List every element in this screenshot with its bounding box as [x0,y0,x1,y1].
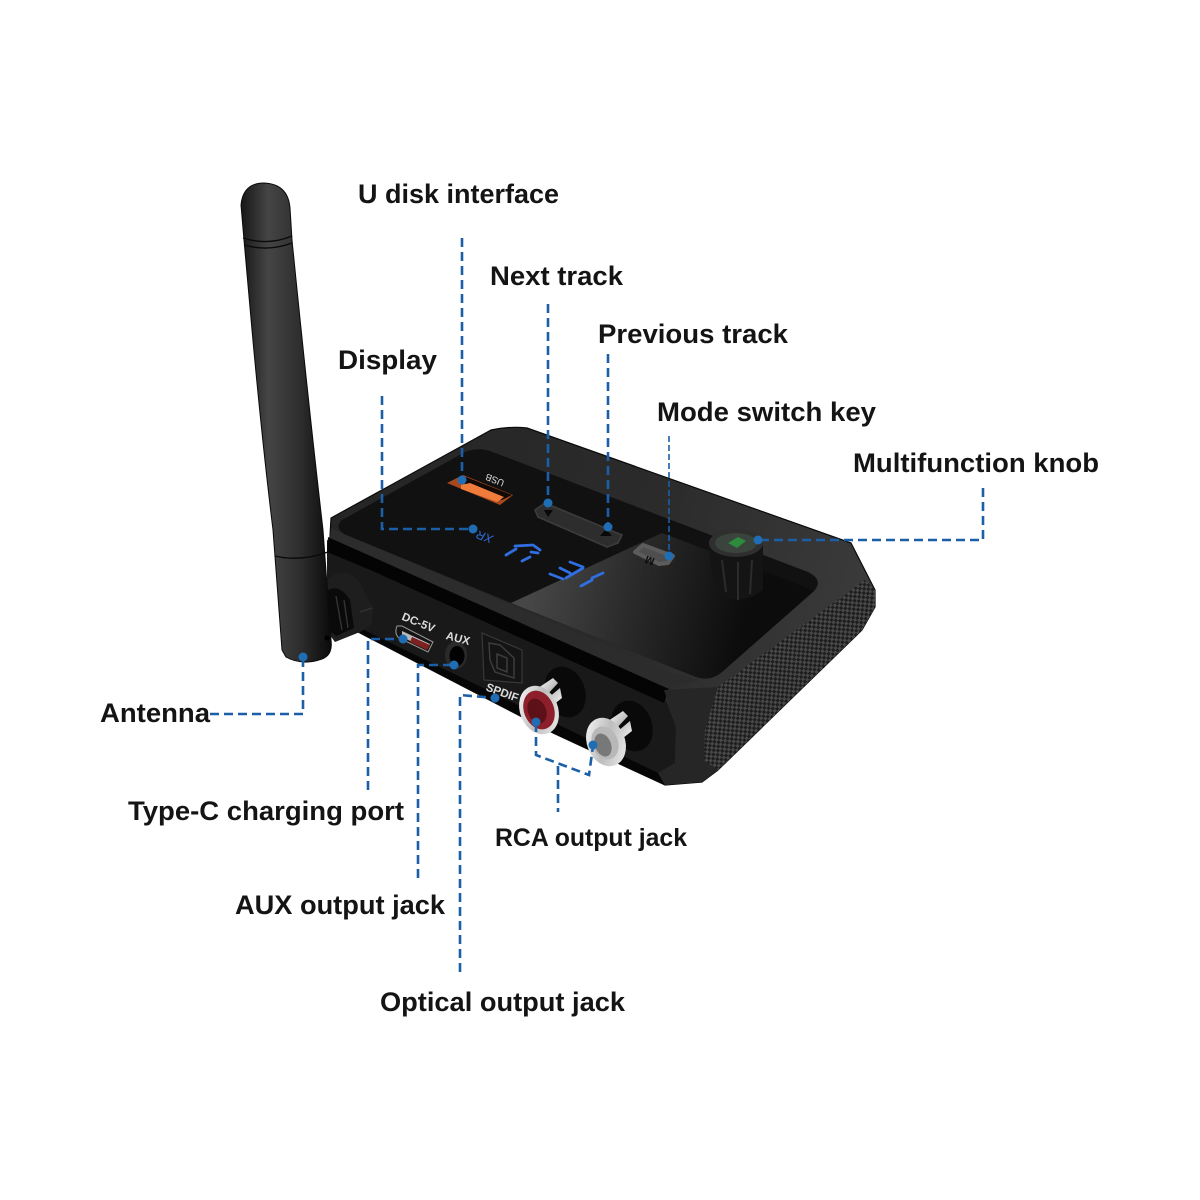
callout: Antenna: Antenna [100,698,211,728]
carbon fibre side panel [704,580,875,770]
callout: Display: Display [338,345,437,375]
multifunction knob [709,529,763,600]
callout: Multifunction knob [754,448,1099,544]
callout: RCA output jack [495,718,687,852]
body silhouette and top bevel [327,427,875,785]
device: audio receiver [241,183,875,785]
previous track arrow [600,529,612,536]
green power indicator [728,537,746,548]
glossy lower panel [511,533,814,679]
white RCA jack [579,695,660,772]
callout: Optical output jack [380,694,626,1017]
callout: Next track: Next track [490,261,624,291]
SPDIF label: SPDIF [484,682,520,705]
mode button letter: M [644,553,656,567]
track buttons [535,503,622,547]
callout: Type-C charging port [128,634,408,826]
USB label: USB [484,471,506,488]
antenna [241,183,331,662]
callout: Next track [490,261,624,508]
DC-5V label: DC-5V [400,611,437,635]
callout: Previous track [598,319,789,532]
callout: Previous track: Previous track [598,319,789,349]
callout: Display [338,345,478,534]
callout: RCA output jack: RCA output jack [495,824,687,852]
callout: Optical output jack: Optical output jack [380,987,626,1017]
top control panel [338,449,818,679]
LED display [506,545,603,586]
callout: Multifunction knob: Multifunction knob [853,448,1099,478]
Type-C port [396,611,437,652]
antenna swivel mount [326,573,374,642]
right corner block [658,687,718,785]
callout: AUX output jack [235,660,458,920]
XR label: XR [474,527,496,547]
callout: Mode switch key: Mode switch key [657,397,876,427]
red RCA jack [512,661,593,740]
antenna ridges [243,236,328,558]
callout: AUX output jack: AUX output jack [235,890,446,920]
front face [327,540,676,785]
callout: U disk interface: U disk interface [358,179,559,209]
AUX jack [444,630,471,669]
optical port [482,633,522,705]
lower front edge [360,628,665,785]
AUX label: AUX [444,630,471,648]
callout: Type-C charging port: Type-C charging port [128,796,404,826]
next track arrow [544,510,553,517]
callout: Mode switch key [657,397,876,560]
callout: Antenna [100,652,308,728]
callout: U disk interface [358,179,559,484]
front black strip [327,537,669,703]
USB port [447,471,513,505]
mode button [635,545,673,567]
bevel band above strip [330,528,700,689]
